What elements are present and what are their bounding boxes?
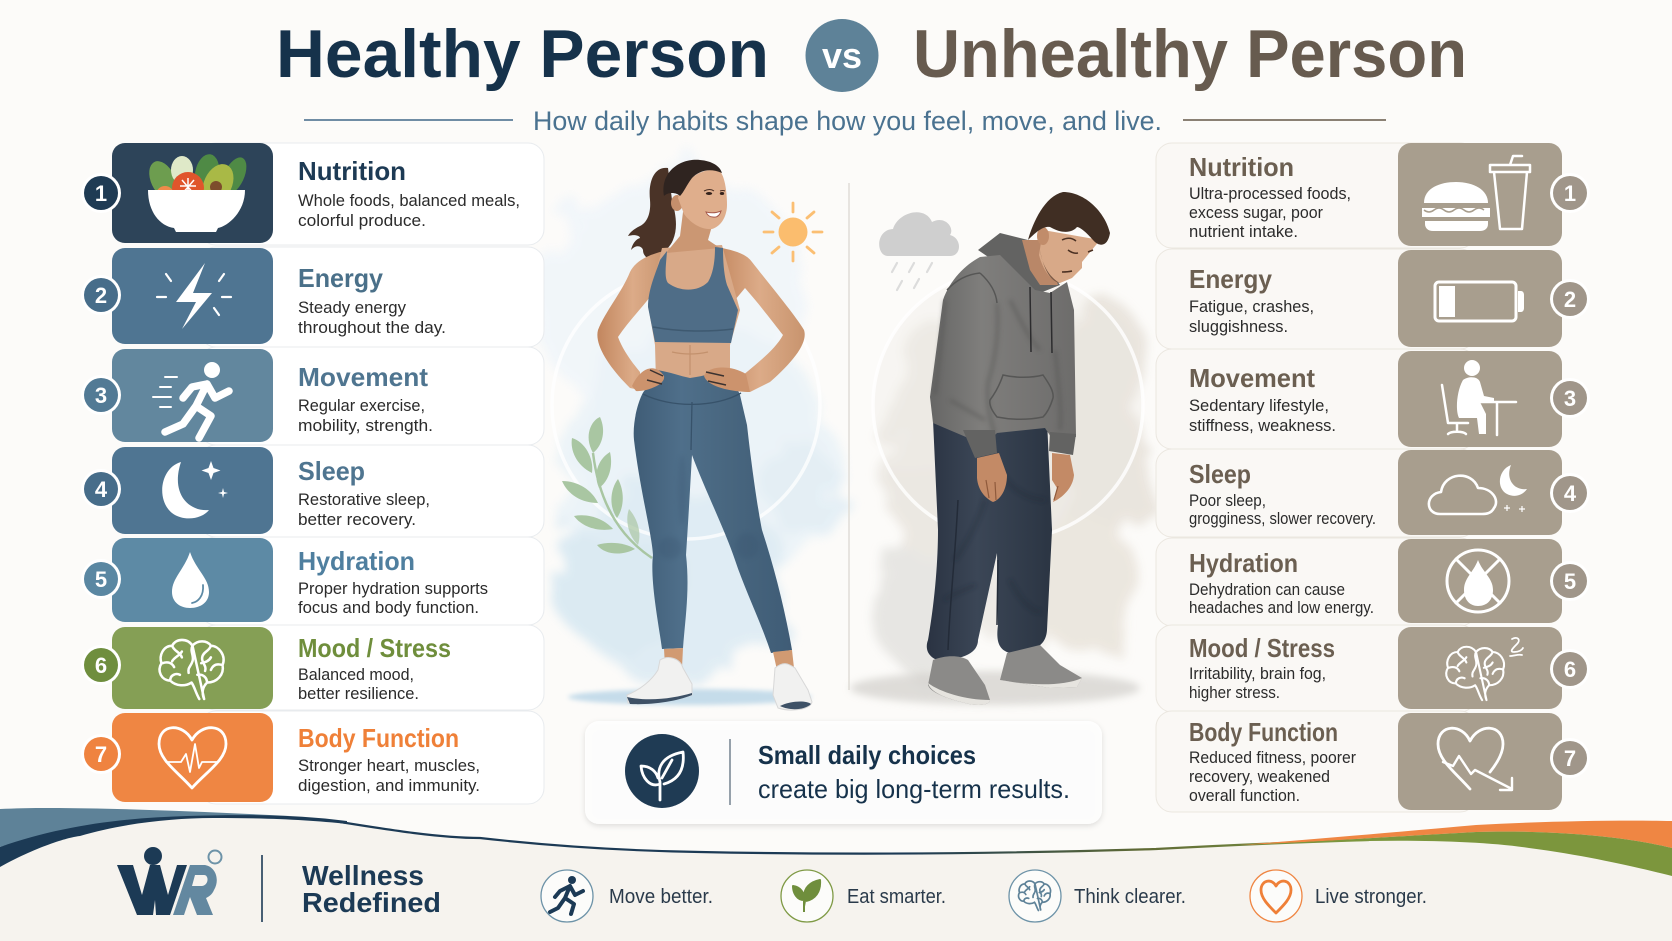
tagline: move better: [541, 870, 713, 922]
hoodie: [930, 255, 1076, 440]
row 5 hydration: headaches and low energy.: [1189, 599, 1374, 617]
facial features: [1062, 238, 1093, 272]
hair: [1028, 192, 1110, 245]
icon: runner: [153, 362, 229, 438]
hoodie shading: [935, 300, 1061, 435]
row 4 sleep: better recovery.: [298, 511, 416, 529]
shoes: [627, 658, 692, 703]
number 7: 7: [95, 742, 107, 767]
row 6 mood: Irritability, brain fog,: [1189, 665, 1326, 683]
row 4 sleep: [81, 445, 544, 537]
tagline: live stronger: Live stronger.: [1315, 886, 1427, 908]
panel: healthy list: [81, 143, 544, 804]
row 7 body function: [81, 711, 544, 804]
torso: [648, 245, 740, 382]
icon: cloud and moon: [1429, 465, 1527, 514]
number 1: [1550, 173, 1590, 213]
number 2: [1550, 279, 1590, 319]
icon: burger and soda: [1422, 156, 1530, 231]
unhealthy ring: [873, 270, 1143, 540]
row 2 energy: Energy: [1189, 264, 1272, 294]
subtitle: How daily habits shape how you feel, move, and live.: [533, 106, 1162, 136]
number 6: 6: [1564, 657, 1576, 682]
row 3 movement: Regular exercise,: [298, 397, 425, 415]
row 5 hydration: [81, 537, 544, 625]
row 7 body function: recovery, weakened: [1189, 768, 1330, 786]
pants: [927, 420, 1052, 660]
wave: green band: [1240, 832, 1672, 876]
icon: brain: [160, 640, 224, 699]
row 7 body function: Body Function: [298, 723, 459, 753]
number 5: [81, 559, 121, 599]
number 3: [1550, 378, 1590, 418]
row 6 mood: Balanced mood,: [298, 666, 414, 684]
icon: rain cloud: [879, 212, 959, 290]
row 1 nutrition: Nutrition: [1189, 152, 1294, 182]
callout text: [758, 740, 1070, 804]
number 4: 4: [95, 477, 108, 502]
row 5 hydration: Hydration: [1189, 548, 1298, 578]
row 7 body function: overall function.: [1189, 787, 1300, 805]
row 7 body function: digestion, and immunity.: [298, 777, 480, 795]
row 7 body function: Stronger heart, muscles,: [298, 757, 480, 775]
logo: WR mark: [117, 847, 222, 915]
ground shadow: [568, 689, 812, 705]
head: [1039, 230, 1100, 283]
number 5: 5: [1564, 569, 1576, 594]
row 6 mood: Mood / Stress: [1189, 633, 1335, 663]
row 4 sleep: Poor sleep,: [1189, 492, 1266, 510]
hands: [632, 367, 750, 392]
facial features: [704, 190, 725, 191]
row 1 nutrition: excess sugar, poor: [1189, 204, 1323, 222]
left arm: [597, 250, 668, 390]
cuffs: [963, 430, 1076, 458]
illustration: unhealthy man: [850, 192, 1140, 705]
number 6: [81, 645, 121, 685]
number 7: [1550, 738, 1590, 778]
icon: foggy brain: [1446, 638, 1523, 700]
row 5 hydration: focus and body function.: [298, 599, 479, 617]
number 6: 6: [95, 653, 107, 678]
row 6 mood: higher stress.: [1189, 684, 1280, 702]
brand name: [302, 860, 441, 918]
number 1: 1: [95, 181, 107, 206]
wave: blue band: [0, 808, 290, 847]
icon: sprout: [625, 734, 699, 808]
row 3 movement: Sedentary lifestyle,: [1189, 397, 1329, 415]
brand name: Redefined: [302, 887, 441, 918]
row 6 mood: Mood / Stress: [298, 633, 451, 663]
icon: water drop: [172, 552, 209, 608]
tagline: live stronger: [1250, 870, 1427, 922]
number 7: [81, 734, 121, 774]
neck: [666, 212, 720, 253]
number 3: [81, 375, 121, 415]
unhealthy watercolor background: [873, 295, 1153, 675]
panel: unhealthy list: [1156, 143, 1590, 812]
row 1 nutrition: Whole foods, balanced meals,: [298, 192, 520, 210]
row 2 energy: throughout the day.: [298, 319, 446, 337]
ground shadow: [850, 671, 1140, 705]
row 6 mood: better resilience.: [298, 685, 419, 703]
leggings: [634, 370, 792, 653]
row 2 energy: Energy: [298, 263, 384, 293]
centre divider: [848, 183, 850, 690]
number 1: 1: [1564, 181, 1576, 206]
number 2: 2: [95, 283, 107, 308]
row 2 energy: [81, 247, 544, 347]
number 6: [1550, 649, 1590, 689]
ankles: [664, 648, 794, 670]
shoes: [928, 656, 990, 705]
pant folds: [945, 470, 1045, 612]
icon: seated person at desk: [1442, 360, 1516, 435]
row 2 energy: sluggishness.: [1189, 318, 1288, 336]
row 7 body function: Body Function: [1189, 717, 1338, 747]
row 5 hydration: [1156, 538, 1590, 626]
row 2 energy: Fatigue, crashes,: [1189, 298, 1314, 316]
wave: navy band: [0, 815, 347, 867]
hands: [977, 453, 1074, 502]
heading: Healthy Person: Healthy Person: [276, 16, 769, 92]
row 3 movement: mobility, strength.: [298, 417, 433, 435]
icon: declining heart: [1438, 728, 1512, 790]
healthy ring: [552, 271, 820, 539]
row 7 body function: [1156, 711, 1590, 812]
number 4: [81, 469, 121, 509]
illustration: healthy woman: [568, 160, 812, 710]
drawstrings: [1030, 287, 1052, 353]
row 3 movement: [81, 347, 544, 445]
title: Healthy Person vs Unhealthy Person: [276, 16, 1467, 92]
row 2 energy: [1156, 249, 1590, 349]
row 3 movement: [1156, 349, 1590, 449]
row 3 movement: Movement: [298, 362, 428, 392]
number 2: 2: [1564, 287, 1576, 312]
hood: [978, 233, 1060, 295]
callout text: create big long-term results.: [758, 774, 1070, 804]
right arm: [714, 246, 805, 392]
icon: crossed water drop: [1447, 550, 1509, 612]
number 5: [1550, 561, 1590, 601]
footer band: [0, 818, 1672, 941]
number 3: 3: [1564, 386, 1576, 411]
callout: small daily choices: [585, 721, 1102, 824]
row 6 mood: [81, 625, 544, 710]
row 6 mood: [1156, 625, 1590, 712]
sports top: [648, 247, 738, 343]
row 3 movement: stiffness, weakness.: [1189, 417, 1336, 435]
wave: thin line: [340, 822, 1369, 854]
row 4 sleep: Sleep: [1189, 459, 1251, 489]
row 1 nutrition: Nutrition: [298, 156, 406, 186]
row 7 body function: Reduced fitness, poorer: [1189, 749, 1356, 767]
hoodie seam and pocket: [947, 273, 1053, 419]
icon: leaf branch: [562, 417, 652, 558]
brand name: Wellness: [302, 860, 424, 891]
ponytail: [628, 168, 676, 258]
row 4 sleep: Restorative sleep,: [298, 491, 430, 509]
heading: Unhealthy Person: Unhealthy Person: [913, 16, 1467, 92]
callout text: Small daily choices: [758, 740, 976, 770]
tagline: eat smarter: Eat smarter.: [847, 886, 946, 908]
row 4 sleep: Sleep: [298, 456, 365, 486]
icon: heart with pulse: [159, 728, 226, 788]
icon: salad bowl: [144, 152, 252, 232]
tagline: think clearer: Think clearer.: [1074, 886, 1186, 908]
row 1 nutrition: colorful produce.: [298, 212, 426, 230]
tagline: eat smarter: [781, 870, 946, 922]
row 1 nutrition: Ultra-processed foods,: [1189, 185, 1351, 203]
number 3: 3: [95, 383, 107, 408]
legging shading: [658, 455, 759, 559]
number 5: 5: [95, 567, 107, 592]
tagline: move better: Move better.: [609, 886, 713, 908]
icon: lightning: [157, 263, 231, 329]
row 3 movement: Movement: [1189, 363, 1315, 393]
row 5 hydration: Dehydration can cause: [1189, 581, 1345, 599]
number 1: [81, 173, 121, 213]
row 1 nutrition: nutrient intake.: [1189, 223, 1298, 241]
tagline: think clearer: [1009, 870, 1186, 922]
hair: [663, 160, 722, 196]
vs badge: [806, 19, 878, 92]
vs badge: vs: [822, 35, 862, 76]
row 1 nutrition: [1156, 143, 1590, 248]
number 2: [81, 275, 121, 315]
number 4: [1550, 473, 1590, 513]
row 4 sleep: [1156, 449, 1590, 537]
head: [671, 195, 683, 211]
number 4: 4: [1564, 481, 1577, 506]
row 2 energy: Steady energy: [298, 299, 407, 317]
neck: [1022, 240, 1058, 285]
row 5 hydration: Hydration: [298, 546, 415, 576]
icon: sun: [764, 203, 822, 261]
number 7: 7: [1564, 746, 1576, 771]
wave: orange band: [1240, 821, 1672, 848]
icon: moon and stars: [162, 461, 228, 518]
icon: low battery: [1435, 282, 1524, 321]
row 4 sleep: grogginess, slower recovery.: [1189, 510, 1376, 528]
row 1 nutrition: [81, 143, 544, 245]
row 5 hydration: Proper hydration supports: [298, 580, 488, 598]
healthy watercolor background: [540, 165, 840, 675]
